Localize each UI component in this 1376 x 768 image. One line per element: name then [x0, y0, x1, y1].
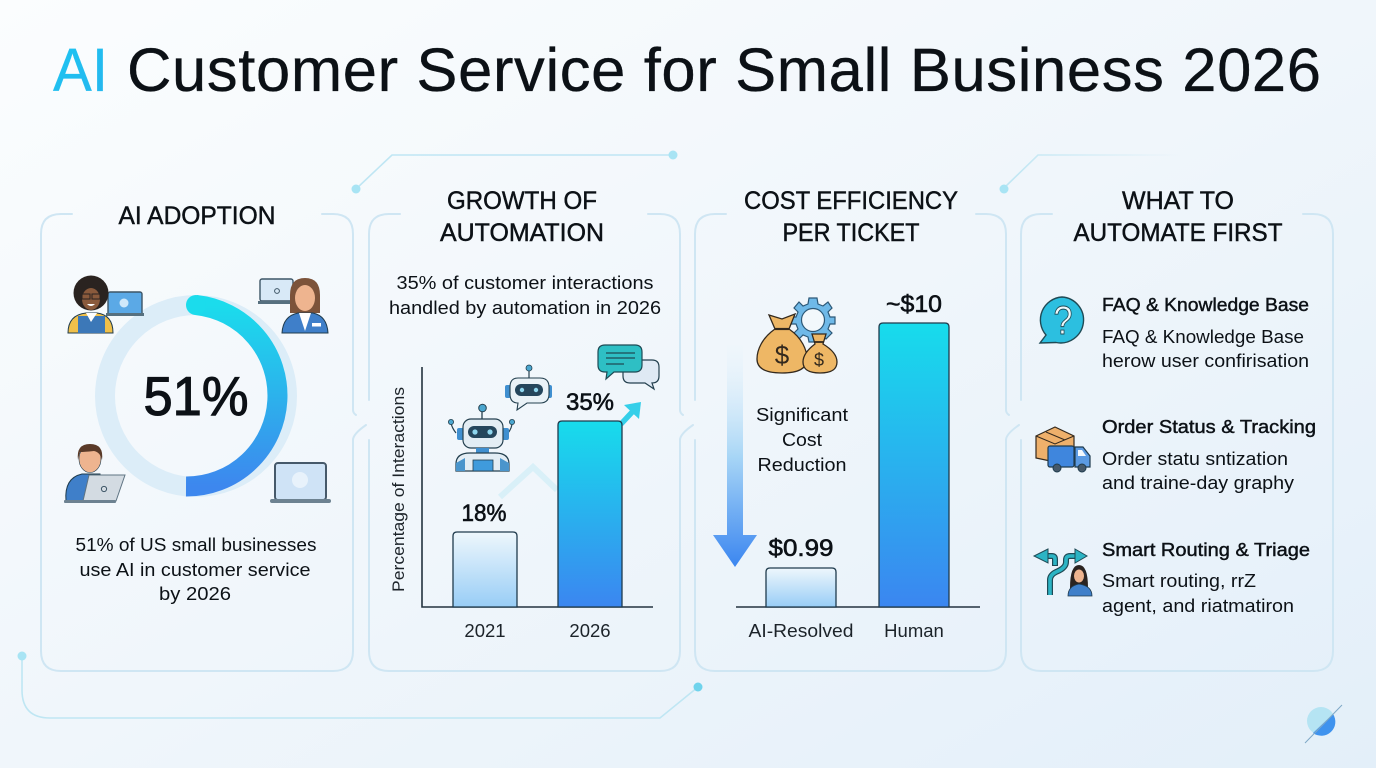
panel: AI adoption	[41, 202, 366, 671]
panel: cost efficiency	[695, 187, 1019, 671]
value: ~$10: ~$10	[886, 291, 942, 318]
bar chart: automation share	[390, 367, 653, 641]
list item: smart routing: Smart routing, rrZ	[1102, 571, 1256, 591]
panel frame: AI adoption	[41, 214, 366, 671]
text: significant cost reduction: Cost	[782, 429, 822, 450]
icon: box and truck	[1036, 427, 1090, 472]
title: Customer Service for Small Business 2026	[127, 36, 1321, 105]
text: adoption summary	[76, 534, 316, 604]
bar: 2026	[558, 421, 622, 607]
label: 2026: 2026	[569, 620, 611, 641]
bar: AI-resolved	[766, 568, 836, 607]
list item: order status: Order statu sntization	[1102, 449, 1288, 469]
text: adoption summary: 51% of US small businesses	[76, 534, 316, 555]
circuit connector: bottom	[18, 652, 702, 718]
icon: routing arrows and agent	[1034, 549, 1092, 596]
heading: growth of automation	[440, 187, 604, 247]
icon: small robot bubble	[505, 365, 552, 410]
axis y	[422, 367, 653, 607]
label: human: Human	[884, 620, 944, 641]
text: automation summary: handled by automation in 2026	[389, 297, 661, 318]
title: AI	[53, 36, 108, 105]
text: significant cost reduction	[756, 404, 848, 475]
trend line behind bars	[500, 467, 557, 497]
list item: FAQ: FAQ & Knowledge Base	[1102, 327, 1304, 347]
panel frame: cost efficiency	[695, 214, 1019, 671]
panel: what to automate first	[1021, 187, 1333, 671]
icon: man with laptop	[64, 444, 125, 503]
icon: large robot	[448, 404, 515, 471]
text: adoption summary: by 2026	[159, 583, 231, 604]
donut chart: 51%	[105, 295, 287, 487]
heading: what to automate first	[1074, 187, 1282, 247]
icon: money bags and gear: $	[814, 350, 824, 370]
label: 2021: 2021	[464, 620, 506, 641]
list item: order status: Order Status & Tracking	[1102, 416, 1316, 437]
icon: laptop	[270, 463, 331, 503]
icon: question bubble	[1040, 297, 1084, 343]
text: significant cost reduction: Significant	[756, 404, 848, 425]
list item: FAQ: FAQ & Knowledge Base	[1102, 294, 1309, 315]
icon: woman with glasses and laptop	[68, 276, 144, 333]
panel frame: growth of automation	[369, 214, 693, 671]
list item: FAQ: herow user confirisation	[1102, 351, 1309, 371]
icon: money bags and gear	[757, 298, 837, 373]
list item: smart routing	[1034, 539, 1310, 616]
circuit connector: top right	[1000, 155, 1180, 194]
value: $0.99: $0.99	[768, 535, 834, 562]
list item: order status: and traine-day graphy	[1102, 473, 1294, 493]
logo mark	[1305, 705, 1342, 743]
text: automation summary	[389, 272, 661, 318]
value: 18%: 18%	[462, 500, 506, 527]
axis label: Percentage of Interactions	[390, 387, 408, 592]
arrow: growth	[621, 402, 641, 424]
value: 35%: 35%	[566, 389, 614, 416]
heading: cost efficiency: COST EFFICIENCY	[744, 187, 958, 215]
icon: woman in blue with laptop	[258, 278, 328, 333]
bar: 2021	[453, 532, 517, 607]
heading: AI adoption: AI ADOPTION	[118, 202, 276, 230]
icon: chat bubbles	[598, 345, 659, 389]
panel: growth of automation	[369, 187, 693, 671]
icon: money bags and gear: $	[775, 340, 790, 370]
list item: order status	[1036, 416, 1316, 493]
arrow: cost falls	[713, 345, 757, 567]
icon: question bubble: ?	[1054, 299, 1072, 343]
heading: what to automate first: WHAT TO	[1122, 187, 1234, 215]
text: adoption summary: use AI in customer service	[80, 559, 310, 580]
bar: human	[879, 323, 949, 607]
list item: smart routing: agent, and riatmatiron	[1102, 596, 1294, 616]
heading: cost efficiency: PER TICKET	[782, 219, 920, 247]
donut chart: 51%: 51%	[144, 365, 248, 427]
label: AI-resolved: AI-Resolved	[748, 620, 854, 641]
text: significant cost reduction: Reduction	[758, 454, 846, 475]
list item: FAQ	[1040, 294, 1309, 371]
heading: growth of automation: GROWTH OF	[447, 187, 597, 215]
circuit connector: top centre	[352, 150, 678, 194]
heading: what to automate first: AUTOMATE FIRST	[1074, 219, 1282, 247]
list item: smart routing: Smart Routing & Triage	[1102, 539, 1310, 560]
heading: cost efficiency	[744, 187, 958, 247]
text: automation summary: 35% of customer interactions	[396, 272, 654, 293]
panel frame: what to automate first	[1021, 214, 1333, 671]
bar chart: cost per ticket	[736, 291, 980, 641]
heading: growth of automation: AUTOMATION	[440, 219, 604, 247]
